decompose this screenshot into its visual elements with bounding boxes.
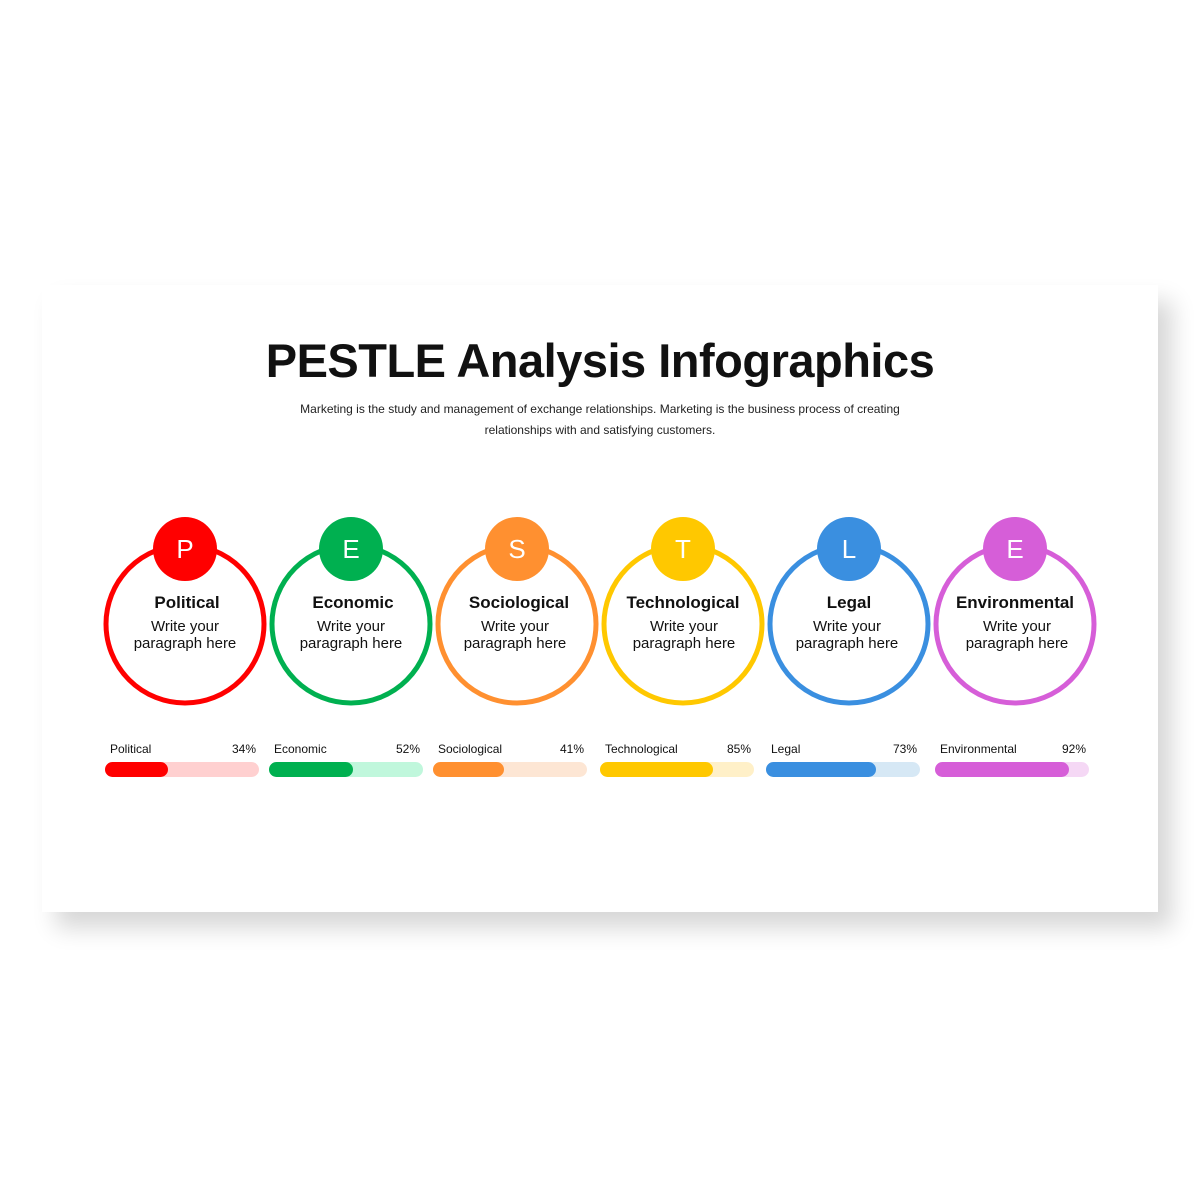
bar: Legal 73%: Legal bbox=[771, 742, 800, 756]
circle: Environmental: paragraph here bbox=[966, 635, 1068, 652]
circle: Environmental bbox=[936, 517, 1094, 703]
circle: Sociological: paragraph here bbox=[464, 635, 566, 652]
circle: Legal: Legal bbox=[827, 593, 871, 612]
bar: Technological 85%: 85% bbox=[727, 742, 751, 756]
circle: Economic: Economic bbox=[312, 593, 394, 612]
circle: Legal bbox=[770, 517, 928, 703]
circle: Sociological: Write your bbox=[481, 618, 549, 635]
bar: Sociological 41%: Sociological bbox=[438, 742, 502, 756]
circle: Technological: Write your bbox=[650, 618, 718, 635]
circle: Environmental: E bbox=[1006, 534, 1024, 564]
circle: Legal: Write your bbox=[813, 618, 881, 635]
bar: Environmental 92% bbox=[935, 742, 1089, 777]
circle: Political: Write your bbox=[151, 618, 219, 635]
circle: Political bbox=[106, 517, 264, 703]
circle: Sociological bbox=[438, 517, 596, 703]
card background bbox=[42, 285, 1158, 912]
bar: Technological 85%: Technological bbox=[605, 742, 678, 756]
bar: Economic 52%: 52% bbox=[396, 742, 420, 756]
bar: Political 34%: 34% bbox=[232, 742, 256, 756]
bar: Legal 73%: 73% bbox=[893, 742, 917, 756]
circle: Technological: paragraph here bbox=[633, 635, 735, 652]
bar: Technological 85% bbox=[600, 742, 754, 777]
circle: Technological: T bbox=[675, 534, 691, 564]
bar: Political 34%: Political bbox=[110, 742, 151, 756]
circle: Sociological: Sociological bbox=[469, 593, 569, 612]
circle: Environmental: Environmental bbox=[956, 593, 1074, 612]
bar: Sociological 41% bbox=[433, 742, 587, 777]
circle: Sociological: S bbox=[508, 534, 526, 564]
circle: Technological: Technological bbox=[626, 593, 740, 612]
bar: Political 34% bbox=[105, 742, 259, 777]
bar: Environmental 92%: Environmental bbox=[940, 742, 1017, 756]
circle: Legal: L bbox=[842, 534, 856, 564]
bar: Economic 52%: Economic bbox=[274, 742, 327, 756]
circle: Political: paragraph here bbox=[134, 635, 236, 652]
bar: Economic 52% bbox=[269, 742, 423, 777]
bar: Legal 73% bbox=[766, 742, 920, 777]
circle: Political: P bbox=[176, 534, 194, 564]
title: PESTLE Analysis Infographics bbox=[266, 334, 934, 387]
circle: Environmental: Write your bbox=[983, 618, 1051, 635]
circle: Political: Political bbox=[154, 593, 220, 612]
circle: Economic bbox=[272, 517, 430, 703]
circle: Legal: paragraph here bbox=[796, 635, 898, 652]
circle: Economic: E bbox=[342, 534, 360, 564]
bar: Environmental 92%: 92% bbox=[1062, 742, 1086, 756]
circle: Economic: Write your bbox=[317, 618, 385, 635]
bar: Sociological 41%: 41% bbox=[560, 742, 584, 756]
circle: Technological bbox=[604, 517, 762, 703]
subtitle: Marketing is the study and management of exchange relationships. Marketing is the business process of creating relationships with and satisfying customers. bbox=[300, 402, 900, 437]
circle: Economic: paragraph here bbox=[300, 635, 402, 652]
